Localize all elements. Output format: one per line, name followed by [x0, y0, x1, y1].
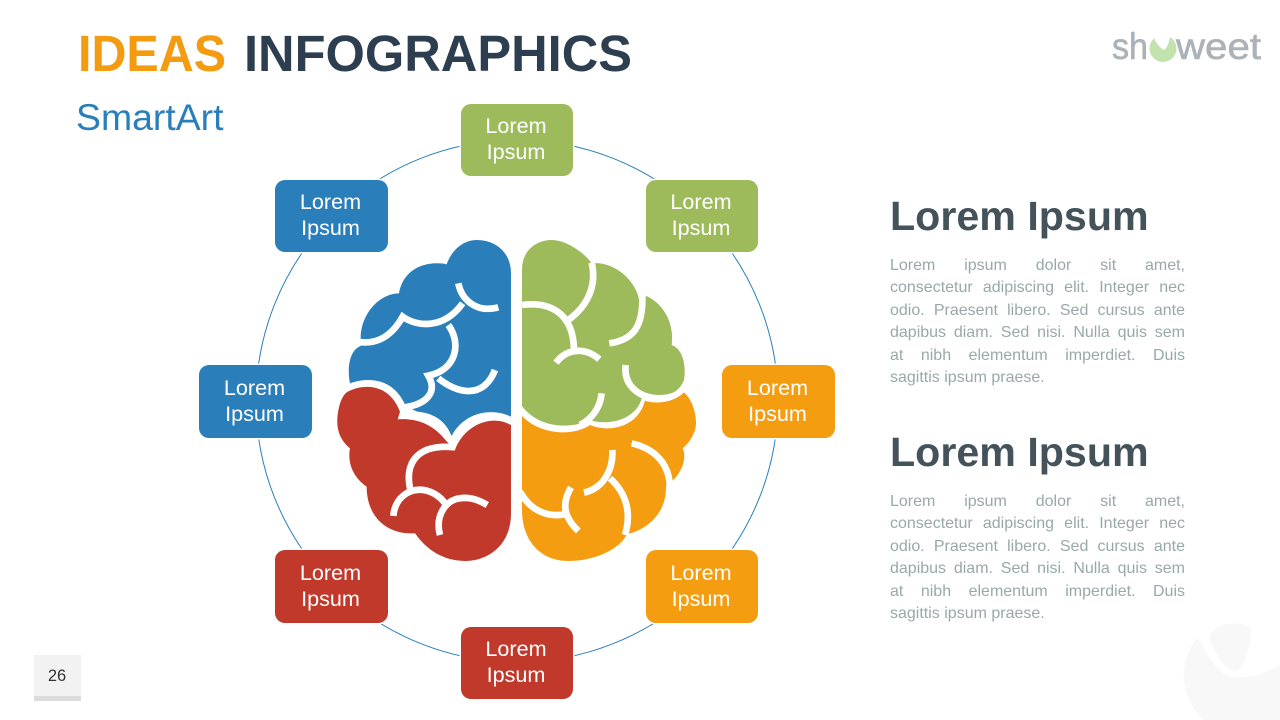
label box: bottom left (red): Ipsum: [301, 586, 360, 611]
label box: bottom right (orange): Lorem: [670, 560, 732, 585]
label box: bottom left (red): Lorem: [300, 560, 361, 585]
paragraph: first text block: at nibh elementum imperdiet. Duis: [890, 347, 1185, 364]
paragraph: first text block: consectetur adipiscing elit. Integer nec: [890, 279, 1185, 296]
title: IDEAS: [78, 25, 226, 82]
label box: top right (green): Lorem: [670, 189, 732, 214]
brain lobe: blue: [349, 240, 511, 436]
logo: showeet: weet: [1175, 26, 1262, 67]
label box: bottom right (orange): [646, 550, 758, 623]
title: [78, 25, 632, 82]
paragraph: first text block: odio. Praesent libero. Sed cursus ante: [890, 302, 1185, 319]
label box: bottom (red): Ipsum: [487, 662, 545, 687]
brain lobe: orange: [520, 392, 696, 561]
page number: 26: [48, 667, 66, 685]
paragraph: second text block: odio. Praesent libero. Sed cursus ante: [890, 538, 1185, 555]
paragraph: second text block: [890, 493, 1185, 622]
paragraph: second text block: Lorem ipsum dolor sit amet,: [890, 493, 1185, 510]
label box: left (blue): [199, 365, 312, 438]
subtitle: SmartArt: [76, 96, 224, 138]
brain: right hemisphere: [520, 240, 696, 561]
logo: showeet: sh: [1112, 26, 1148, 67]
label box: top left (blue): Ipsum: [301, 215, 360, 240]
label box: left (blue): Lorem: [224, 375, 285, 400]
label box: right (orange): Ipsum: [748, 401, 807, 426]
label box: top left (blue): [275, 180, 388, 252]
label box: right (orange): Lorem: [747, 375, 808, 400]
heading: second text block: Lorem Ipsum: [890, 429, 1149, 475]
watermark logo: [1184, 623, 1280, 720]
label box: bottom (red): [461, 627, 573, 699]
label box: top right (green): Ipsum: [672, 215, 730, 240]
paragraph: second text block: consectetur adipiscing elit. Integer nec: [890, 515, 1185, 532]
label box: bottom left (red): [275, 550, 388, 623]
label box: right (orange): [722, 365, 835, 438]
paragraph: second text block: dapibus diam. Sed nisi. Nulla quis sem: [890, 560, 1185, 577]
paragraph: first text block: Lorem ipsum dolor sit amet,: [890, 257, 1185, 274]
heading: first text block: Lorem Ipsum: [890, 193, 1149, 239]
paragraph: first text block: dapibus diam. Sed nisi. Nulla quis sem: [890, 324, 1185, 341]
label box: top right (green): [646, 180, 758, 252]
paragraph: second text block: sagittis ipsum praese.: [890, 605, 1045, 622]
label box: top (green): Lorem: [485, 113, 547, 138]
label box: bottom (red): Lorem: [485, 636, 547, 661]
brain lobe: red: [337, 387, 511, 561]
paragraph: first text block: [890, 257, 1185, 386]
label box: left (blue): Ipsum: [225, 401, 284, 426]
page number: [34, 655, 81, 701]
logo: showeet: [1112, 26, 1262, 67]
label box: top (green): Ipsum: [487, 139, 545, 164]
brain lobe: green: [522, 240, 685, 426]
paragraph: second text block: at nibh elementum imperdiet. Duis: [890, 583, 1185, 600]
paragraph: first text block: sagittis ipsum praese.: [890, 369, 1045, 386]
ring connecting the label boxes: [256, 140, 778, 662]
label box: bottom right (orange): Ipsum: [672, 586, 730, 611]
label box: top left (blue): Lorem: [300, 189, 361, 214]
label box: top (green): [461, 104, 573, 176]
brain: left hemisphere: [337, 240, 511, 561]
title: INFOGRAPHICS: [244, 25, 632, 82]
